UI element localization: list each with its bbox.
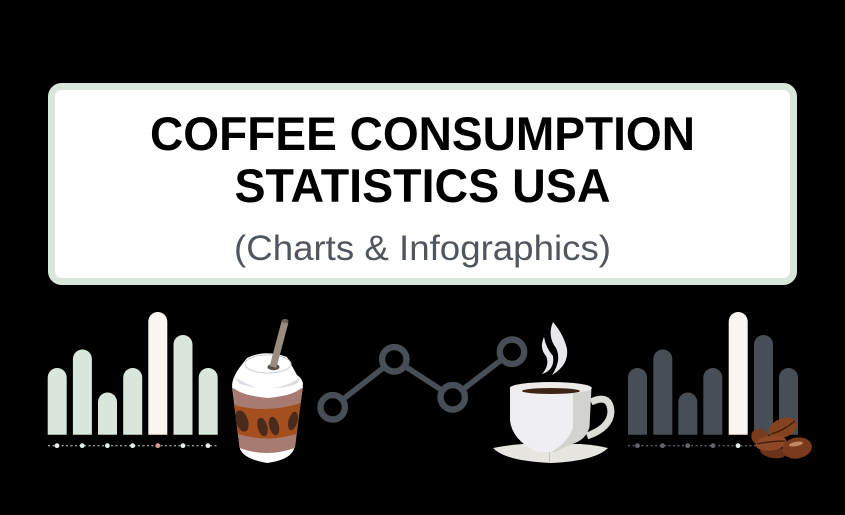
bar chart: dark	[628, 312, 798, 448]
bar chart: light	[48, 312, 218, 448]
heading: title line 2: STATISTICS USA	[234, 159, 610, 212]
icon: coffee cup and saucer	[493, 322, 611, 463]
subtitle: (Charts & Infographics)	[234, 229, 611, 268]
line chart icon	[320, 340, 524, 419]
icon: coffee beans	[748, 414, 814, 461]
icon: takeaway coffee cup	[232, 319, 303, 463]
heading: title line 1: COFFEE CONSUMPTION	[150, 107, 695, 160]
panel: title card	[52, 86, 794, 282]
